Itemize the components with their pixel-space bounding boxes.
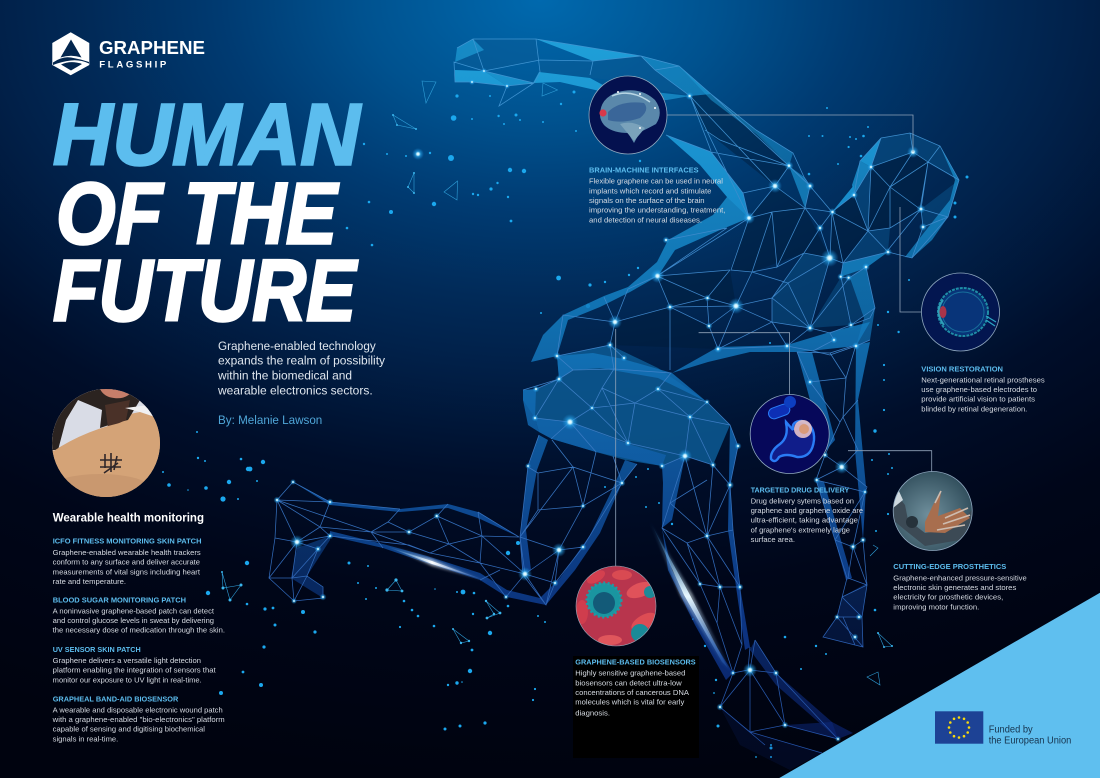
icon: eye [922, 273, 1000, 351]
wearable health monitoring panel: Wearable health monitoring [53, 511, 204, 525]
icon: brain [589, 76, 667, 154]
intro text: within the biomedical and [217, 368, 352, 382]
item: GraphEAL: with a graphene-enabled "bio-electronics" platform [52, 715, 225, 724]
panel: targeted drug delivery [750, 394, 863, 544]
text: vision [921, 365, 1045, 413]
text: drug: surface area. [751, 535, 795, 544]
title [53, 87, 362, 340]
text: drug: graphene and graphene oxide are [751, 506, 863, 515]
logo [52, 32, 205, 75]
item: ICFO: conform to any surface and deliver accurate [53, 558, 200, 567]
item: blood sugar [53, 596, 225, 635]
background scattered particles [162, 90, 968, 758]
text: prosthetics: CUTTING-EDGE PROSTHETICS [893, 562, 1006, 571]
item: blood sugar: and control glucose levels in sweat by delivering [53, 616, 214, 625]
text: brain: implants which record and stimulate [589, 186, 711, 195]
text: biosensors: diagnosis. [575, 709, 610, 718]
item: GraphEAL: A wearable and disposable electronic wound patch [53, 705, 223, 714]
connector lines [616, 115, 932, 567]
item: ICFO: ICFO FITNESS MONITORING SKIN PATCH [53, 537, 202, 546]
intro text [217, 339, 386, 427]
item: UV [53, 645, 217, 684]
text: biosensors [575, 657, 696, 718]
text: prosthetics [893, 562, 1027, 611]
intro text: expands the realm of possibility [218, 354, 386, 368]
panel: graphene-based biosensors [573, 566, 699, 758]
photo: tattoo skin patch [50, 389, 160, 502]
item: ICFO: measurements of vital signs including heart [53, 567, 201, 576]
text: brain: and detection of neural diseases. [589, 215, 702, 224]
text: biosensors: GRAPHENE-BASED BIOSENSORS [575, 657, 696, 666]
panel: brain-machine interfaces [589, 76, 725, 224]
EU funding: Funded by [989, 724, 1033, 735]
title: FUTURE [53, 243, 359, 340]
small constellations [221, 81, 893, 685]
corner triangle [779, 593, 1100, 778]
icon: stomach [750, 394, 829, 474]
intro text: wearable electronics sectors. [217, 383, 373, 397]
glowing nodes [274, 68, 927, 742]
bright blue bands [291, 39, 959, 770]
dark facets of the body [610, 94, 928, 349]
text: brain: Flexible graphene can be used in neural [589, 177, 723, 186]
item: ICFO: rate and temperature. [53, 577, 126, 586]
logo: FLAGSHIP [99, 59, 167, 70]
item: blood sugar: the necessary dose of medication through the skin. [53, 626, 225, 635]
icon: robotic hand [893, 472, 976, 550]
item: UV: Graphene delivers a versatile light detection [53, 656, 201, 665]
text: vision: Next-generational retinal prostheses [921, 375, 1045, 384]
item: blood sugar: A noninvasive graphene-based patch can detect [53, 606, 215, 615]
item: UV: platform enabling the integration of sensors that [53, 666, 217, 675]
text: prosthetics: electronic skin generates and stores [893, 583, 1017, 592]
icon: virus and blood cells [576, 566, 660, 646]
text: vision: use graphene-based electrodes to [921, 385, 1037, 394]
text: biosensors: biosensors can detect ultra-low [575, 678, 682, 687]
item: UV: monitor our exposure to UV light in real-time. [53, 675, 202, 684]
item: GraphEAL: signals in real-time. [53, 734, 118, 743]
title: OF THE [56, 166, 340, 263]
item: GraphEAL: capable of sensing and digitising biochemical [53, 725, 205, 734]
text: biosensors: concentrations of cancerous DNA [575, 688, 689, 697]
black text box [573, 656, 699, 758]
item: blood sugar: BLOOD SUGAR MONITORING PATCH [53, 596, 186, 605]
text: vision: VISION RESTORATION [921, 365, 1003, 374]
item: GraphEAL [52, 694, 225, 743]
text: brain [589, 166, 725, 224]
EU funding: the European Union [989, 735, 1071, 746]
text: drug: Drug delivery sytems based on [751, 496, 854, 505]
medium blue facets [455, 39, 959, 466]
text: biosensors: Highly sensitive graphene-based [575, 669, 685, 678]
text: biosensors: molecules which is vital for early [575, 698, 685, 707]
polygon human figure [269, 39, 959, 770]
item: ICFO: Graphene-enabled wearable health trackers [53, 548, 201, 557]
text: vision: provide artificial vision to patients [921, 395, 1035, 404]
EU funding [935, 711, 1071, 746]
wearable health monitoring panel [52, 511, 225, 743]
text: drug: of graphene's extremely large [751, 525, 850, 534]
mesh wireframe [454, 39, 959, 370]
text: drug: ultra-efficient, taking advantage [751, 516, 858, 525]
icon: EU flag [935, 711, 983, 744]
text: brain: improving the understanding, treatment, [589, 206, 725, 215]
text: brain: BRAIN-MACHINE INTERFACES [589, 166, 699, 175]
text: prosthetics: electricity for prosthetic devices, [893, 593, 1003, 602]
title: HUMAN [53, 87, 362, 184]
text: prosthetics: improving motor function. [893, 602, 979, 611]
intro text: Graphene-enabled technology [218, 339, 377, 353]
panel: cutting-edge prosthetics [893, 472, 1027, 611]
item: GraphEAL: GRAPHEAL BAND-AID BIOSENSOR [53, 694, 179, 703]
icon: hexagon sail [52, 32, 89, 75]
intro text: By: Melanie Lawson [218, 413, 322, 427]
text: prosthetics: Graphene-enhanced pressure-sensitive [893, 573, 1027, 582]
text: drug: TARGETED DRUG DELIVERY [751, 486, 849, 495]
text: brain: signals on the surface of the brain [589, 196, 705, 205]
text: vision: blinded by retinal degeneration. [921, 404, 1027, 413]
logo: GRAPHENE [99, 37, 205, 58]
text: drug [751, 486, 863, 544]
panel: vision restoration [921, 273, 1045, 413]
light streaks [380, 518, 732, 672]
item: ICFO [53, 537, 202, 586]
item: UV: UV SENSOR SKIN PATCH [53, 645, 141, 654]
